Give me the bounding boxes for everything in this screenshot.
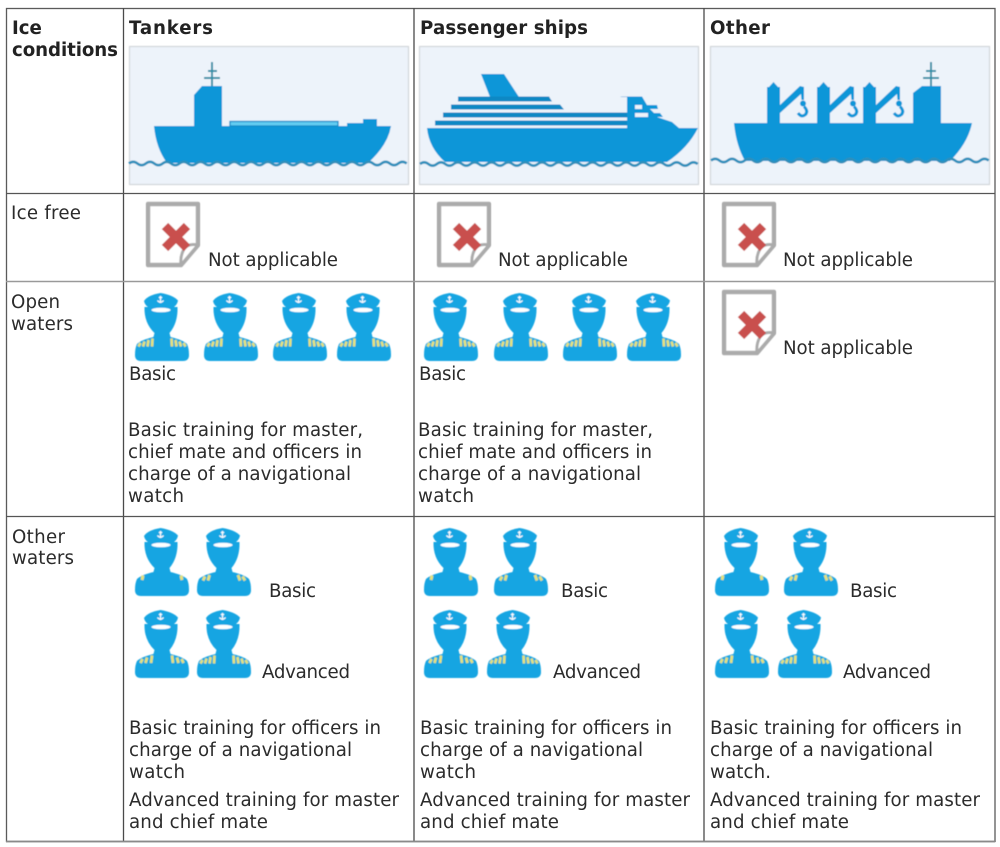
row label: open waters: [11, 292, 73, 335]
text: passenger ships other waters: Basic: [561, 581, 608, 602]
text: tankers open waters: charge of a navigational: [128, 464, 351, 485]
not applicable: passenger ships ice free: Not applicable: [498, 250, 628, 271]
row label: open waters: Open: [11, 292, 60, 313]
heading: other: Other: [710, 18, 770, 39]
text: tankers open waters: Basic training for master,: [128, 420, 363, 441]
text: tankers open waters: [128, 364, 363, 507]
row label: other waters: waters: [12, 548, 74, 569]
officers: other ships other waters: [715, 528, 838, 678]
text: passenger ships open waters: chief mate and officers in: [418, 442, 652, 463]
text: tankers other waters: [129, 581, 400, 833]
text: passenger ships open waters: [418, 364, 653, 507]
heading: passenger ships: Passenger ships: [420, 18, 588, 39]
text: tankers other waters: Advanced training for master: [129, 790, 400, 811]
text: tankers open waters: watch: [128, 486, 184, 507]
heading: tankers: Tankers: [129, 18, 213, 39]
text: tankers open waters: Basic: [129, 364, 176, 385]
text: passenger ships other waters: Advanced: [553, 662, 641, 683]
officers: tankers open waters: [135, 293, 391, 361]
text: tankers other waters: and chief mate: [129, 812, 268, 833]
panel: tanker illustration: [129, 46, 408, 184]
text: tankers other waters: charge of a navigational: [129, 740, 352, 761]
text: passenger ships open waters: charge of a navigational: [418, 464, 641, 485]
not applicable: passenger ships ice free: [439, 204, 628, 271]
text: other ships other waters: watch.: [710, 762, 771, 783]
heading: ice conditions: conditions: [12, 40, 118, 61]
text: passenger ships other waters: Advanced training for master: [420, 790, 691, 811]
not applicable: other open waters: Not applicable: [783, 338, 913, 359]
text: passenger ships other waters: charge of a navigational: [420, 740, 643, 761]
text: passenger ships other waters: [420, 581, 691, 833]
text: passenger ships open waters: Basic: [419, 364, 466, 385]
text: other ships other waters: [710, 581, 981, 833]
text: other ships other waters: Basic training for officers in: [710, 718, 962, 739]
row label: other waters: Other: [12, 527, 66, 548]
officers: passenger ships open waters: [424, 293, 681, 361]
panel: other ship illustration: [710, 46, 990, 184]
panel: passenger ship illustration: [420, 46, 698, 184]
text: other ships other waters: and chief mate: [710, 812, 849, 833]
row label: ice free: Ice free: [11, 203, 81, 224]
officers: passenger ships other waters: [424, 528, 548, 678]
text: passenger ships open waters: watch: [418, 486, 474, 507]
not applicable: tankers ice free: Not applicable: [208, 250, 338, 271]
not applicable: other open waters: [724, 292, 913, 359]
heading: ice conditions: Ice: [12, 18, 42, 39]
text: tankers other waters: Basic training for officers in: [129, 718, 381, 739]
officers: tankers other waters: [135, 528, 251, 678]
text: passenger ships other waters: watch: [420, 762, 476, 783]
text: tankers other waters: Advanced: [262, 662, 350, 683]
text: passenger ships open waters: Basic training for master,: [418, 420, 653, 441]
not applicable: other ice free: [724, 204, 913, 271]
text: other ships other waters: Advanced: [843, 662, 931, 683]
text: passenger ships other waters: and chief mate: [420, 812, 559, 833]
text: other ships other waters: Basic: [850, 581, 897, 602]
row label: other waters: [12, 527, 74, 569]
text: passenger ships other waters: Basic training for officers in: [420, 718, 672, 739]
text: tankers open waters: chief mate and officers in: [128, 442, 362, 463]
not applicable: other ice free: Not applicable: [783, 250, 913, 271]
text: tankers other waters: watch: [129, 762, 185, 783]
heading: ice conditions: [12, 18, 118, 61]
text: other ships other waters: Advanced training for master: [710, 790, 981, 811]
text: tankers other waters: Basic: [269, 581, 316, 602]
text: other ships other waters: charge of a navigational: [710, 740, 933, 761]
row label: open waters: waters: [11, 314, 73, 335]
not applicable: tankers ice free: [148, 204, 338, 271]
